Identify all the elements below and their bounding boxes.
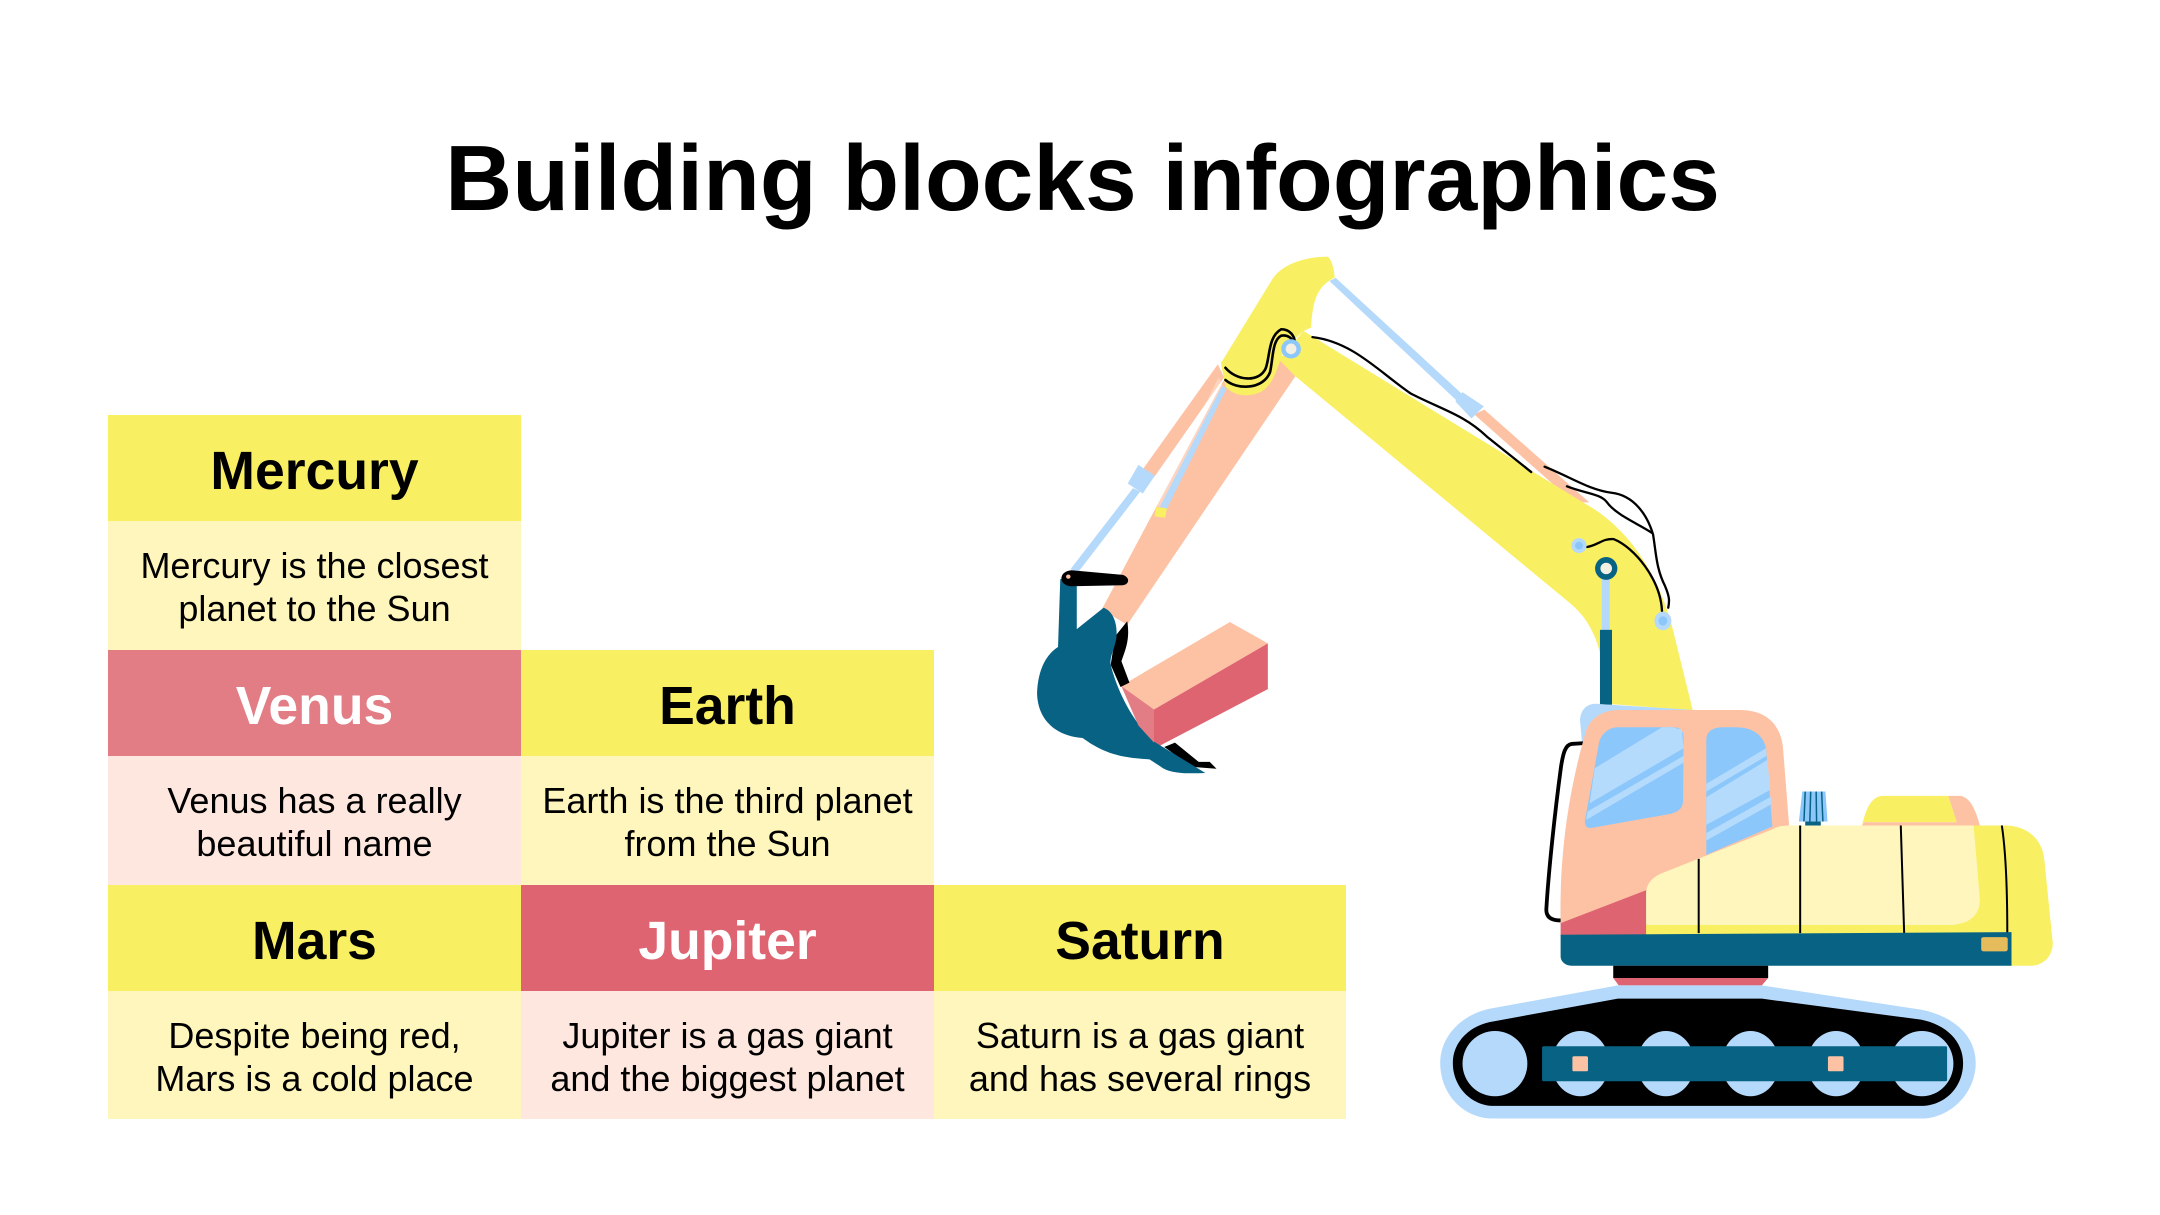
heading: Earth: Earth (659, 677, 796, 736)
pin: boom small (1571, 538, 1587, 553)
heading: Saturn: Saturn (1055, 912, 1225, 971)
track: teal bar (1542, 1046, 1947, 1081)
heading: Jupiter (521, 885, 934, 991)
heading: Mars: Mars (252, 912, 377, 971)
text: Mars description (108, 991, 521, 1119)
body: cream engine cover (1646, 826, 1980, 925)
text: Mars description: Mars is a cold place (155, 1058, 474, 1099)
text: Earth description: from the Sun (624, 823, 831, 864)
panel: Venus (108, 650, 521, 885)
cab: front window (1585, 727, 1684, 828)
track: light blue outer (1440, 985, 1976, 1119)
heading: Mars (108, 885, 521, 991)
panel: Mars (108, 885, 521, 1119)
engine hood hump (1862, 796, 1980, 826)
excavator cab, body and tracks (1440, 704, 2053, 1119)
text: Venus description: beautiful name (196, 823, 433, 864)
text: Jupiter description: and the biggest planet (550, 1058, 905, 1099)
pin: boom lower (1654, 612, 1671, 630)
cab: peach shell (1560, 710, 1789, 923)
bucket link: black lever (1061, 570, 1128, 586)
text: Jupiter description (521, 991, 934, 1119)
block: left face (1121, 686, 1154, 743)
boom: main yellow arm (1279, 331, 1693, 711)
track: black inner (1453, 999, 1963, 1106)
cab: light blue back (1580, 704, 1694, 747)
text: Mercury description (108, 521, 521, 650)
pin: elbow joint (1281, 339, 1301, 359)
text: Venus description (108, 756, 521, 885)
heading: Jupiter: Jupiter (638, 912, 817, 971)
cylinder: boom rod (1329, 278, 1589, 502)
text: Jupiter description: Jupiter is a gas giant (562, 1015, 893, 1056)
body: yellow rear and lower band (1646, 826, 2053, 966)
text: Mercury description: planet to the Sun (178, 588, 451, 629)
text: Saturn description: Saturn is a gas giant (976, 1015, 1304, 1056)
panel: Saturn (934, 885, 1346, 1119)
heading: Mercury (108, 415, 521, 521)
track: peach bolt right (1828, 1056, 1844, 1071)
heading: Earth (521, 650, 934, 756)
cab: side window (1706, 727, 1772, 855)
body: panel lines (1699, 826, 2007, 933)
body: teal chassis (1561, 932, 2012, 966)
swivel base (1613, 966, 1768, 985)
arm: peach stick (1102, 358, 1298, 625)
title: Building blocks infographics (445, 126, 1720, 230)
track: peach bolt left (1572, 1056, 1588, 1071)
text: Earth description: Earth is the third planet (542, 780, 913, 821)
muffler (1799, 792, 1828, 826)
text: Mercury description: Mercury is the closest (140, 545, 489, 586)
bucket: teal scoop (1037, 579, 1205, 773)
body: red corner panel (1561, 890, 1647, 936)
bucket: black back and tooth (1111, 621, 1217, 769)
hoses: black wires (1225, 329, 1669, 611)
panel: Mercury (108, 415, 521, 650)
panel: Jupiter (521, 885, 934, 1119)
cylinder: left peach rod and blue piston (1071, 364, 1224, 573)
body: orange light (1981, 937, 2008, 951)
text: Earth description (521, 756, 934, 885)
cylinder: inner rod (1154, 377, 1227, 518)
panel: Earth (521, 650, 934, 885)
text: Mars description: Despite being red, (168, 1015, 461, 1056)
building block: peach and red (1121, 622, 1268, 749)
heading: Saturn (934, 885, 1346, 991)
track wheels (1463, 1031, 1953, 1096)
excavator arm, boom and bucket (1037, 257, 1693, 773)
heading: Venus: Venus (236, 677, 393, 736)
text: Saturn description (934, 991, 1346, 1119)
boom lift cylinder (1595, 557, 1617, 705)
text: Saturn description: and has several rings (969, 1058, 1311, 1099)
text: Venus description: Venus has a really (167, 780, 462, 821)
heading: Venus (108, 650, 521, 756)
boom: yellow knuckle (1221, 257, 1335, 395)
heading: Mercury: Mercury (210, 442, 419, 501)
cab handle (1546, 743, 1582, 920)
